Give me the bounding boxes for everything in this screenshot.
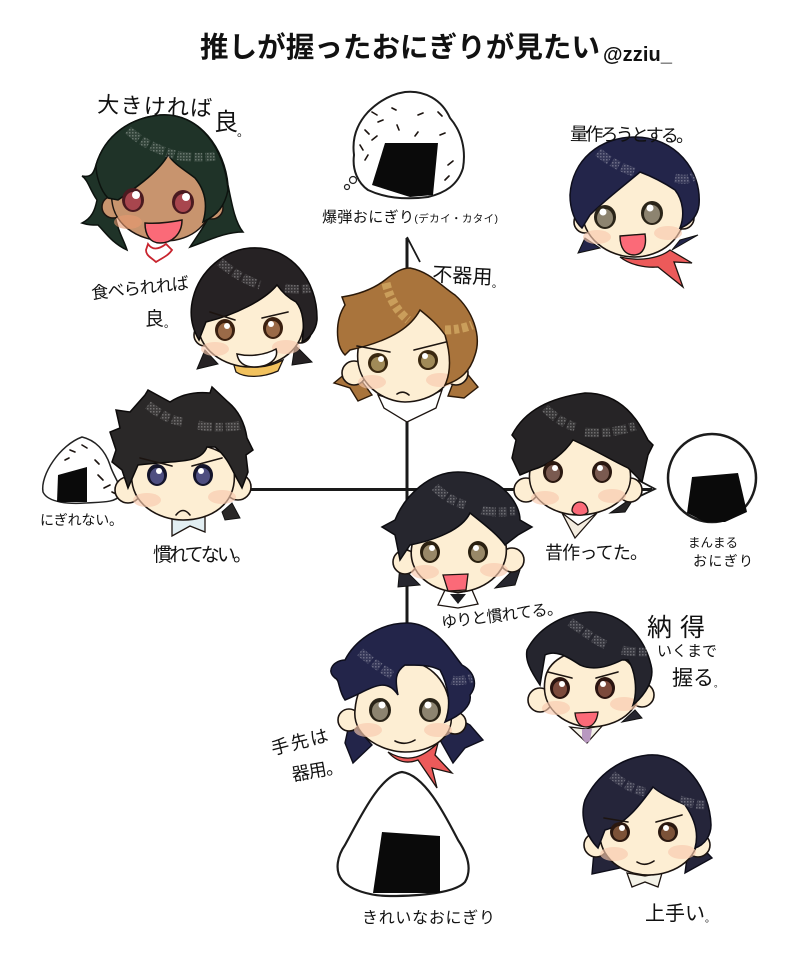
- smile: [637, 861, 654, 864]
- ears: [630, 683, 654, 707]
- ears: [393, 550, 417, 574]
- label: fairly used to it: ゆりと慣れてる。: [440, 599, 564, 632]
- scarf: [388, 743, 452, 788]
- ears: [102, 196, 124, 218]
- hair: [331, 623, 474, 722]
- rice ball: neat triangle: [338, 772, 469, 896]
- smile: [395, 740, 415, 743]
- necktie knot: [146, 244, 172, 262]
- label: until satisfied: 握る: [672, 667, 714, 690]
- face skin: [411, 508, 506, 592]
- blush: [654, 226, 682, 240]
- collar: [438, 590, 478, 608]
- right wing: [222, 503, 240, 520]
- blush: [201, 342, 229, 356]
- eyes: [420, 541, 440, 563]
- ears: [574, 211, 596, 233]
- hair: [110, 387, 253, 488]
- hair: [527, 612, 652, 705]
- blush: [272, 340, 300, 354]
- label: can't shape: にぎれない。: [40, 512, 123, 528]
- collar: [562, 513, 597, 538]
- mouth: [575, 712, 598, 727]
- back wings: [578, 235, 698, 253]
- hair: [570, 137, 699, 228]
- brows: [604, 815, 682, 822]
- mouth: [620, 234, 646, 255]
- mouth: [572, 502, 588, 515]
- mouth: [145, 220, 182, 243]
- highlight: [435, 487, 515, 512]
- face skin: [600, 784, 698, 875]
- hair: [382, 472, 532, 560]
- ears: [338, 709, 360, 731]
- blush: [424, 723, 452, 737]
- face skin: [355, 661, 451, 752]
- title: 推しが握ったおにぎりが見たい: [200, 31, 600, 64]
- yellow collar: [233, 360, 283, 376]
- back wings: [592, 835, 712, 874]
- ears: [528, 688, 552, 712]
- mouth: [443, 574, 468, 591]
- face: brown hair center top: [334, 268, 478, 422]
- hair: [338, 268, 477, 385]
- ears: [514, 478, 538, 502]
- eyes: [594, 205, 616, 229]
- ears: [444, 361, 468, 385]
- highlight: [598, 152, 694, 179]
- title: @zziu_: [603, 44, 673, 66]
- ears: [618, 478, 642, 502]
- blush: [480, 563, 508, 577]
- label: round onigiri: おにぎり: [693, 553, 753, 569]
- label: edible is good: 良: [145, 309, 164, 330]
- highlight: [545, 408, 635, 433]
- ears: [444, 712, 466, 734]
- eyes: [215, 319, 235, 341]
- label: skilled: 上手い: [645, 903, 705, 925]
- blush: [668, 845, 696, 859]
- label: skilled: 。: [705, 914, 715, 925]
- label: dexterous: 器用。: [290, 756, 345, 785]
- label: edible is good: [90, 274, 190, 330]
- face: left dark curly hair: [110, 387, 253, 536]
- blush: [542, 701, 570, 715]
- blush: [358, 375, 386, 389]
- eyes: [122, 188, 144, 212]
- face: bottom center navy wavy hair with scarf: [331, 623, 483, 788]
- collar and tie: [570, 725, 603, 743]
- label: big is good: [97, 92, 249, 139]
- label: clumsy: 。: [492, 278, 503, 291]
- label: big is good: 大きければ: [97, 92, 213, 121]
- highlight: [360, 652, 472, 681]
- blush: [610, 697, 638, 711]
- hair: [583, 755, 711, 848]
- eyes: [543, 461, 563, 483]
- label: makes a lot: 量作ろうとする。: [570, 124, 694, 146]
- blush: [411, 565, 439, 579]
- ears: [672, 207, 694, 229]
- ears: [500, 548, 524, 572]
- ears: [194, 324, 216, 346]
- label: edible is good: 食べられれば: [90, 274, 190, 303]
- face skin: [582, 164, 686, 257]
- blush: [133, 493, 161, 507]
- eyes: [369, 698, 391, 722]
- blush: [426, 373, 454, 387]
- blush: [600, 847, 628, 861]
- ears: [342, 361, 366, 385]
- hair back: [82, 115, 243, 250]
- highlight: [148, 405, 242, 427]
- face: black hair with yellow collar: [191, 248, 317, 376]
- label: until satisfied: いくまで: [657, 643, 717, 660]
- face: center lower: [382, 472, 532, 608]
- hair: [191, 248, 317, 342]
- back wings: [334, 365, 478, 401]
- label: dexterous: 手先は: [269, 725, 330, 759]
- teeth grin: [237, 349, 277, 367]
- label: dexterous: [269, 725, 345, 785]
- ears: [225, 474, 251, 500]
- label: neat onigiri: きれいなおにぎり: [362, 909, 495, 927]
- blush: [208, 490, 236, 504]
- label: used to make: 昔作ってた。: [545, 543, 648, 563]
- hair front: [96, 115, 228, 222]
- hair: [512, 393, 653, 482]
- face skin: [544, 650, 639, 727]
- collar: [627, 873, 662, 887]
- back wings: [398, 565, 520, 588]
- rice ball: bomb onigiri: [344, 92, 464, 198]
- eyes: [147, 464, 167, 486]
- highlight: [570, 622, 648, 652]
- back wings: [197, 345, 312, 369]
- blush: [114, 215, 142, 229]
- wing: [622, 710, 642, 722]
- face: right black hair: [512, 393, 653, 538]
- face skin: [529, 436, 631, 515]
- collar: [378, 390, 442, 422]
- blush: [598, 489, 626, 503]
- brows: [548, 672, 618, 678]
- scarf: [620, 250, 692, 287]
- face: green hair character: [82, 115, 243, 262]
- face: bottom right smiling: [583, 755, 712, 887]
- highlight: [128, 130, 215, 157]
- axis lines with arrows: [245, 237, 655, 625]
- label: until satisfied: 納得: [647, 614, 705, 642]
- label: bomb onigiri: 爆弾おにぎり(デカイ・カタイ): [322, 209, 498, 226]
- label: not used to it: 慣れてない。: [153, 544, 252, 566]
- highlight: [386, 283, 472, 330]
- label: round onigiri: まんまる: [688, 536, 738, 550]
- eyes: [550, 677, 570, 699]
- label: big is good: 。: [237, 125, 249, 139]
- label: edible is good: 。: [164, 318, 175, 330]
- blush: [354, 723, 382, 737]
- face skin: [132, 444, 234, 520]
- face skin: [198, 278, 304, 367]
- face skin: [112, 149, 212, 241]
- wing: [610, 495, 636, 513]
- ears: [201, 197, 223, 219]
- label: clumsy: 不器用: [432, 264, 493, 289]
- face: top right navy hair with scarf: [570, 137, 699, 287]
- highlight: [612, 775, 706, 805]
- collar: [172, 516, 205, 536]
- label: round onigiri: [688, 536, 753, 569]
- ears: [289, 321, 311, 343]
- blush: [531, 491, 559, 505]
- rice ball: round: [668, 434, 756, 522]
- collar shadow: [450, 594, 466, 604]
- highlight: [220, 262, 310, 290]
- rice ball: left messy: [43, 437, 120, 503]
- brows and mouth: [140, 458, 222, 515]
- face skin: [358, 305, 456, 402]
- tie: [582, 729, 592, 743]
- face: right with tie: [527, 612, 654, 743]
- ears: [115, 477, 141, 503]
- blush: [583, 230, 611, 244]
- eyes: [368, 353, 388, 373]
- brows: [210, 312, 288, 320]
- ears: [584, 833, 608, 857]
- label: big is good: 良: [214, 109, 238, 136]
- eyes: [610, 822, 630, 842]
- label: until satisfied: [647, 614, 723, 690]
- brows and mouth: [357, 342, 446, 395]
- ears: [686, 833, 710, 857]
- label: until satisfied: 。: [714, 679, 723, 689]
- back wings: [345, 715, 483, 763]
